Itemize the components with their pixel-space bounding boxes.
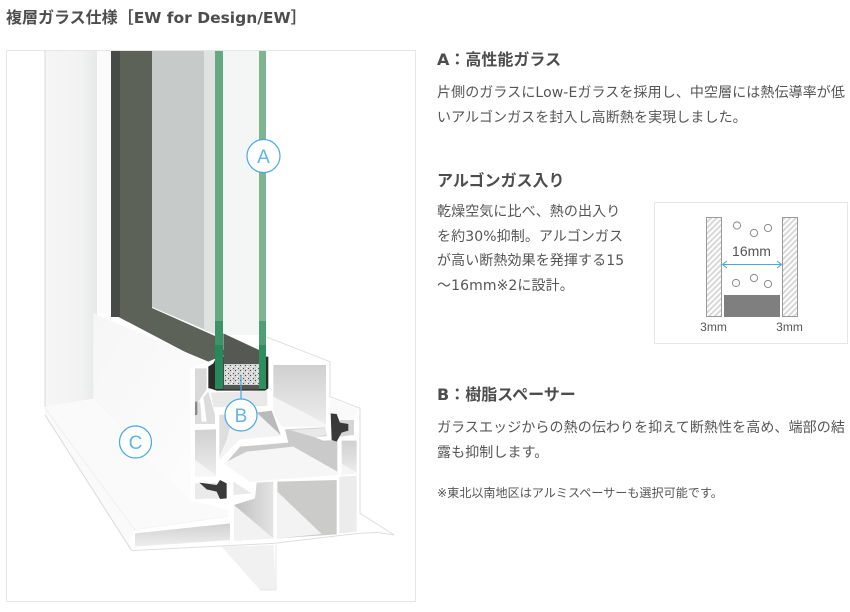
- cavity M1: [219, 411, 281, 460]
- text block: A description: [437, 84, 845, 126]
- callout A: [247, 140, 280, 172]
- callout C: [120, 426, 152, 458]
- text block: A description: いアルゴンガスを封入し高断熱を実現しました。: [437, 110, 747, 126]
- cavities lower: [135, 523, 230, 547]
- panel: argon gas 16mm diagram: 3mm: [776, 320, 803, 334]
- frame face: [93, 313, 208, 500]
- callout B: [225, 375, 257, 431]
- heading: B resin spacer: B：樹脂スペーサー: [437, 385, 576, 404]
- sill: [45, 399, 228, 551]
- foam spacer: [224, 364, 259, 385]
- gasket bottom: [199, 480, 227, 499]
- cavity top right: [273, 365, 326, 427]
- text block: argon description: が高い断熱効果を発揮する15: [437, 253, 624, 269]
- text block: argon description: を約30%抑制。アルゴンガス: [437, 229, 623, 245]
- gasket right: [331, 413, 348, 442]
- footnote: ※東北以南地区はアルミスペーサーも選択可能です。: [437, 486, 723, 500]
- gasket left: [208, 367, 215, 388]
- panel: argon gas 16mm diagram: 16mm: [732, 243, 771, 259]
- text block: argon description: [437, 204, 624, 294]
- text block: argon description: 乾燥空気に比べ、熱の出入り: [437, 204, 620, 220]
- panel: argon gas 16mm diagram: [654, 202, 848, 344]
- text block: B description: 露も抑制します。: [437, 445, 548, 461]
- glass panes: [215, 51, 223, 321]
- text block: A description: 片側のガラスにLow-Eガラスを採用し、中空層には熱伝導率が低: [437, 85, 845, 101]
- callout A: A: [257, 147, 270, 168]
- heading: A high-performance glass: A：高性能ガラス: [437, 50, 561, 69]
- text block: B description: [437, 420, 845, 461]
- callout B: B: [235, 406, 247, 427]
- cavities left: [195, 368, 207, 407]
- wall reveal: [45, 51, 97, 407]
- text block: B description: ガラスエッジからの熱の伝わりを抑えて断熱性を高め、端部の結: [437, 420, 845, 436]
- title: 複層ガラス仕様［EW for Design/EW］: [6, 8, 307, 27]
- panel border: [6, 50, 416, 602]
- panel: argon gas 16mm diagram: 3mm: [700, 320, 727, 334]
- cavity M2: [226, 427, 337, 482]
- glazing spacer block: [208, 357, 268, 391]
- text block: argon description: ～16mm※2に設計。: [437, 278, 574, 294]
- heading: argon gas: アルゴンガス入り: [437, 171, 565, 190]
- lower fin: [222, 545, 276, 590]
- callout C: C: [129, 433, 142, 454]
- upper right ledge: [330, 398, 358, 419]
- main profile: [132, 337, 394, 551]
- dark frame and inner glass: [111, 51, 260, 390]
- cavity under spacer: [211, 391, 267, 407]
